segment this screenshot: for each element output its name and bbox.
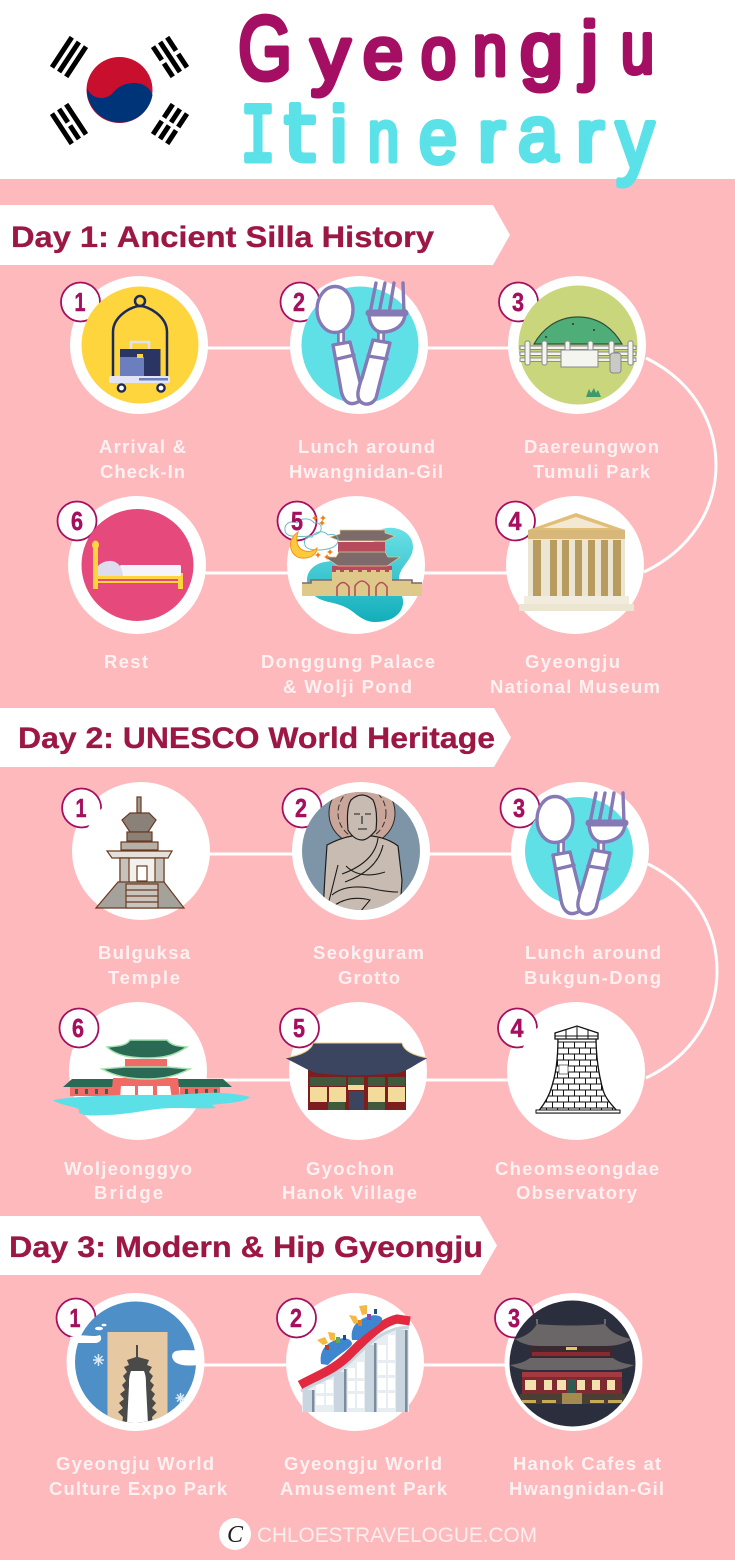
title: Itinerary: t [284, 87, 315, 180]
icon: burial mound and fence [518, 286, 638, 404]
badge 1 [62, 788, 101, 828]
connector: day 2 route [138, 854, 717, 1080]
badge 5 [278, 502, 316, 540]
stop: Woljeonggyo Bridge [53, 1002, 250, 1203]
badge 1 [56, 1298, 96, 1338]
heading ribbon: day 3: Day 3: Modern & Hip Gyeongju [9, 1231, 483, 1264]
title: Gyeongju: u [621, 9, 654, 89]
label: Bukgun-Dong [524, 967, 661, 988]
icon: stone Buddha [302, 792, 420, 910]
number 3: 3 [508, 1303, 520, 1333]
icon: hanok house [285, 1043, 428, 1110]
label [524, 942, 661, 988]
stop: Rest [58, 496, 206, 672]
icon: luggage cart [82, 286, 198, 404]
label: Hanok Village [282, 1182, 417, 1203]
icon: logo disc [219, 1518, 251, 1550]
badge 3 [499, 282, 538, 322]
icon: museum [519, 513, 634, 611]
label: Amusement Park [280, 1478, 448, 1499]
icon: Expo tower poster [70, 1298, 200, 1428]
number 2: 2 [293, 287, 305, 317]
stop: Lunch around Bukgun-Dong [500, 782, 661, 988]
label: Culture Expo Park [49, 1478, 228, 1499]
icon: Woljeonggyo bridge [53, 1040, 250, 1116]
header [50, 0, 654, 187]
number 6: 6 [71, 506, 83, 536]
badge 6 [60, 1008, 98, 1048]
stop: Daereungwon Tumuli Park [499, 276, 659, 482]
stop: Gyeongju World Amusement Park [277, 1293, 448, 1499]
badge 4 [496, 502, 535, 540]
label: Hwangnidan-Gil [289, 461, 443, 482]
connector: day 1 route [137, 348, 716, 573]
title: Gyeongju: o [421, 14, 456, 94]
label [98, 942, 191, 988]
connector: day 3 route [135, 1364, 574, 1366]
label: Woljeonggyo [64, 1158, 192, 1179]
title: Itinerary: i [330, 90, 347, 178]
label: Gyeongju World [284, 1453, 442, 1474]
stop: Arrival and Check-In [61, 276, 208, 482]
number 4: 4 [508, 506, 522, 536]
stop: Gyeongju National Museum [490, 496, 660, 697]
title: Gyeongju: y [311, 12, 350, 97]
label: Gyeongju World [56, 1453, 214, 1474]
title: Itinerary: a [518, 89, 559, 177]
label: & Wolji Pond [283, 676, 412, 697]
badge 5 [280, 1008, 319, 1048]
number 2: 2 [295, 793, 307, 823]
title: Gyeongju: j [579, 7, 598, 92]
icon: hanok cafe at night [510, 1300, 636, 1426]
title: Itinerary: e [419, 95, 457, 180]
badge 2 [282, 788, 322, 828]
number 3: 3 [512, 287, 524, 317]
label: National Museum [490, 676, 660, 697]
label [289, 436, 443, 482]
title: Gyeongju: e [363, 14, 403, 94]
icon: spoon and fork [537, 793, 625, 914]
icon: Cheomseongdae tower [530, 1026, 625, 1113]
label: Temple [108, 967, 180, 988]
stop: Lunch around Hwangnidan-Gil [280, 276, 443, 482]
label: Grotto [338, 967, 400, 988]
label: Cheomseongdae [495, 1158, 659, 1179]
label [99, 436, 186, 482]
badge 4 [498, 1008, 537, 1048]
stop: Donggung Palace and Wolji Pond [261, 496, 435, 697]
footer: website credit [219, 1518, 537, 1550]
label [509, 1453, 664, 1499]
label [495, 1158, 659, 1203]
icon: Bulguksa pagoda [96, 797, 184, 908]
title: Itinerary: y [616, 91, 654, 187]
label [49, 1453, 228, 1499]
heading ribbon: day 3 [0, 1216, 497, 1275]
badge 3 [500, 788, 540, 828]
title: Itinerary: r [576, 97, 604, 177]
stop: Gyochon Hanok Village [280, 1002, 428, 1203]
icon: South Korean flag [50, 36, 189, 145]
heading ribbon: day 2: Day 2: UNESCO World Heritage [18, 722, 495, 755]
label: Rest [104, 651, 148, 672]
logo initial: C [227, 1522, 244, 1548]
number 6: 6 [72, 1013, 84, 1043]
label [490, 651, 660, 697]
label: Tumuli Park [533, 461, 651, 482]
label: Bridge [94, 1182, 163, 1203]
panel: day 3 [0, 1216, 664, 1499]
label: Donggung Palace [261, 651, 435, 672]
panel: day 1 [0, 205, 716, 697]
stop: Seokguram Grotto [282, 781, 430, 988]
stop: Gyeongju World Culture Expo Park [49, 1293, 228, 1499]
disc: white mask [83, 793, 199, 909]
stop: Bulguksa Temple [62, 782, 210, 988]
badge 2 [280, 282, 320, 322]
label [313, 942, 424, 988]
icon: bed [82, 509, 194, 621]
label: Bulguksa [98, 942, 191, 963]
panel: day 2 [0, 708, 717, 1203]
label: Gyeongju [525, 651, 620, 672]
heading ribbon: day 1 [0, 205, 510, 265]
label: Hwangnidan-Gil [509, 1478, 664, 1499]
label: Check-In [100, 461, 185, 482]
number 3: 3 [513, 793, 525, 823]
website address: CHLOESTRAVELOGUE.COM [257, 1524, 537, 1547]
heading ribbon: day 1: Day 1: Ancient Silla History [11, 221, 434, 254]
icon: spoon and fork [317, 283, 405, 404]
title: Gyeongju: G [238, 0, 292, 99]
number 1: 1 [76, 793, 86, 823]
number 5: 5 [291, 506, 303, 536]
number 2: 2 [290, 1303, 302, 1333]
number 5: 5 [293, 1013, 305, 1043]
number 4: 4 [510, 1013, 524, 1043]
label [282, 1158, 417, 1203]
label: Arrival & [99, 436, 186, 457]
title: Itinerary: n [368, 97, 399, 177]
number 1: 1 [74, 287, 86, 317]
title: Itinerary: r [478, 97, 505, 177]
icon: palace at night [285, 515, 422, 622]
title: Gyeongju: n [473, 11, 507, 91]
label [280, 1453, 448, 1499]
label [524, 436, 659, 482]
heading ribbon: day 2 [0, 708, 511, 767]
label: Seokguram [313, 942, 424, 963]
disc: teal background [525, 797, 633, 905]
disc: teal background [302, 286, 418, 404]
label: Lunch around [298, 436, 435, 457]
title: Gyeongju: g [520, 7, 563, 92]
stop: Cheomseongdae Observatory [495, 1002, 659, 1203]
title: Itinerary: I [240, 92, 276, 187]
badge 1 [61, 282, 100, 322]
label: Daereungwon [524, 436, 659, 457]
label: Hanok Cafes at [513, 1453, 661, 1474]
label [64, 1158, 192, 1203]
badge 6 [58, 502, 96, 540]
label: Observatory [516, 1182, 638, 1203]
stop: Hanok Cafes at Hwangnidan-Gil [495, 1293, 664, 1499]
label: Lunch around [525, 942, 661, 963]
badge 3 [495, 1298, 534, 1338]
number 1: 1 [70, 1303, 80, 1333]
icon: roller coaster [300, 1305, 410, 1412]
badge 2 [277, 1298, 316, 1338]
label [261, 651, 435, 697]
disc: white mask [518, 1013, 634, 1129]
label: Gyochon [306, 1158, 394, 1179]
